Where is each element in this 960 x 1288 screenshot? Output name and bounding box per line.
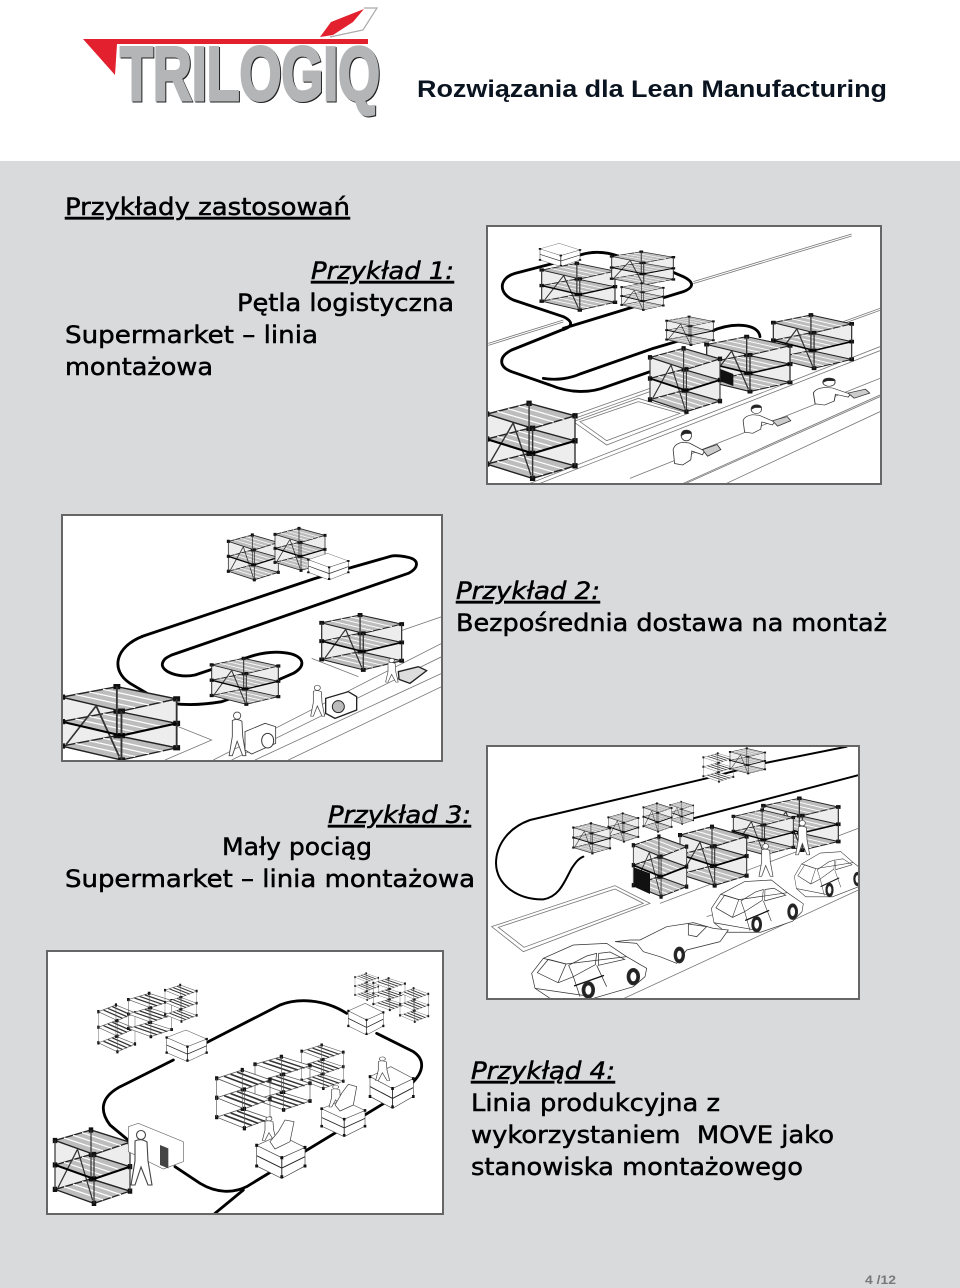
page number: 4 /12	[865, 1273, 896, 1287]
panel: example 1 illustration	[484, 226, 881, 484]
example 1 text: Przykład 1:	[311, 257, 454, 285]
panel: example 4 illustration	[47, 951, 443, 1214]
example 4 text: stanowiska montażowego	[471, 1153, 803, 1181]
example 3 text: Supermarket – linia montażowa	[65, 865, 475, 893]
logo: Trilogiq: TRILOGIQ	[120, 32, 380, 117]
example 4 text: wykorzystaniem MOVE jako	[471, 1121, 834, 1149]
cars on the line	[532, 852, 866, 998]
small train track	[496, 747, 859, 899]
example 2 text: Przykład 2:	[456, 577, 600, 605]
workers and products	[229, 659, 427, 756]
example 1 text: montażowa	[65, 353, 213, 381]
supermarket racks	[572, 747, 766, 854]
header tagline: Rozwiązania dla Lean Manufacturing	[417, 76, 887, 103]
assembly workers and seats	[262, 1057, 390, 1149]
delivery track	[118, 556, 416, 705]
MOVE carts	[165, 1003, 415, 1178]
example 1 text	[65, 257, 454, 381]
supermarket racks	[484, 243, 715, 481]
header	[0, 0, 960, 161]
example 4 text: Przykłąd 4:	[471, 1057, 615, 1085]
panel: example 3 illustration	[487, 746, 866, 1003]
supermarket racks	[58, 527, 404, 763]
panel: example 2 illustration	[58, 515, 442, 763]
example 3 text	[65, 801, 475, 893]
line-side racks	[632, 796, 841, 899]
production loop track	[103, 1001, 422, 1213]
work bench with operator	[128, 1123, 183, 1185]
example 1 text: Supermarket – linia	[65, 321, 318, 349]
example 1 text: Pętla logistyczna	[237, 289, 454, 317]
workers	[759, 820, 810, 876]
example 2 text	[456, 577, 887, 637]
example 3 text: Mały pociąg	[222, 833, 372, 861]
example 2 text: Bezpośrednia dostawa na montaż	[456, 609, 887, 637]
loop track	[502, 252, 760, 391]
logo: Trilogiq	[83, 8, 380, 117]
example 4 text	[471, 1057, 834, 1181]
example 3 text: Przykład 3:	[328, 801, 471, 829]
workers	[673, 378, 870, 465]
example 4 text: Linia produkcyjna z	[471, 1089, 720, 1117]
supply racks	[53, 972, 429, 1206]
line-side racks	[648, 313, 854, 414]
section heading: Przykłady zastosowań	[65, 193, 350, 221]
